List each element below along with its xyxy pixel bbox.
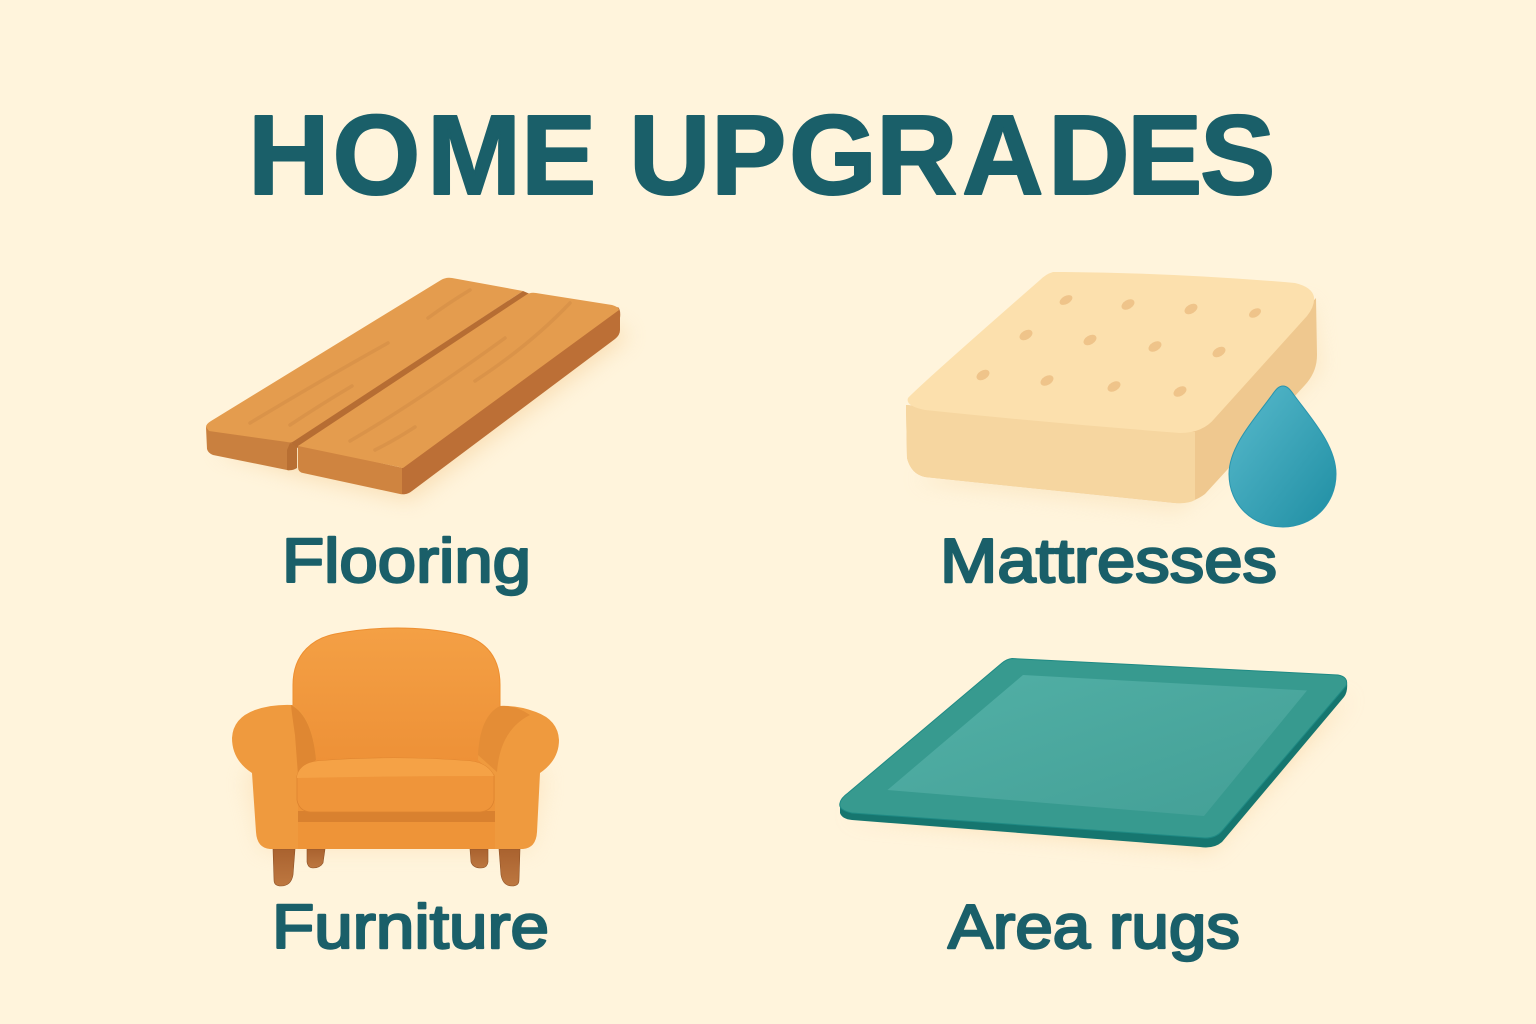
seat cushion xyxy=(297,758,494,812)
mattress tufts xyxy=(975,293,1263,399)
water drop xyxy=(1229,386,1336,527)
right plank xyxy=(298,293,620,494)
rug edge xyxy=(840,682,1347,847)
chair back xyxy=(293,628,500,770)
icon: armchair xyxy=(232,628,559,886)
left arm xyxy=(232,705,316,849)
chair legs xyxy=(273,849,520,886)
rug inner panel xyxy=(888,675,1307,816)
icon: wood planks xyxy=(206,278,630,500)
left plank xyxy=(206,278,530,470)
right arm xyxy=(478,706,559,849)
title: HOME UPGRADES xyxy=(248,92,1275,218)
mattress front xyxy=(906,405,1195,503)
label: Furniture: Furniture xyxy=(272,893,549,962)
rug border xyxy=(840,658,1347,838)
icon: mattress with water drop xyxy=(906,272,1336,527)
label: Mattresses: Mattresses xyxy=(940,527,1277,596)
mattress side xyxy=(906,298,1317,503)
mattress top xyxy=(908,272,1314,433)
label: Area rugs: Area rugs xyxy=(948,893,1240,962)
icon: area rug xyxy=(840,658,1350,850)
label: Flooring: Flooring xyxy=(282,527,531,596)
chair base xyxy=(298,770,495,849)
